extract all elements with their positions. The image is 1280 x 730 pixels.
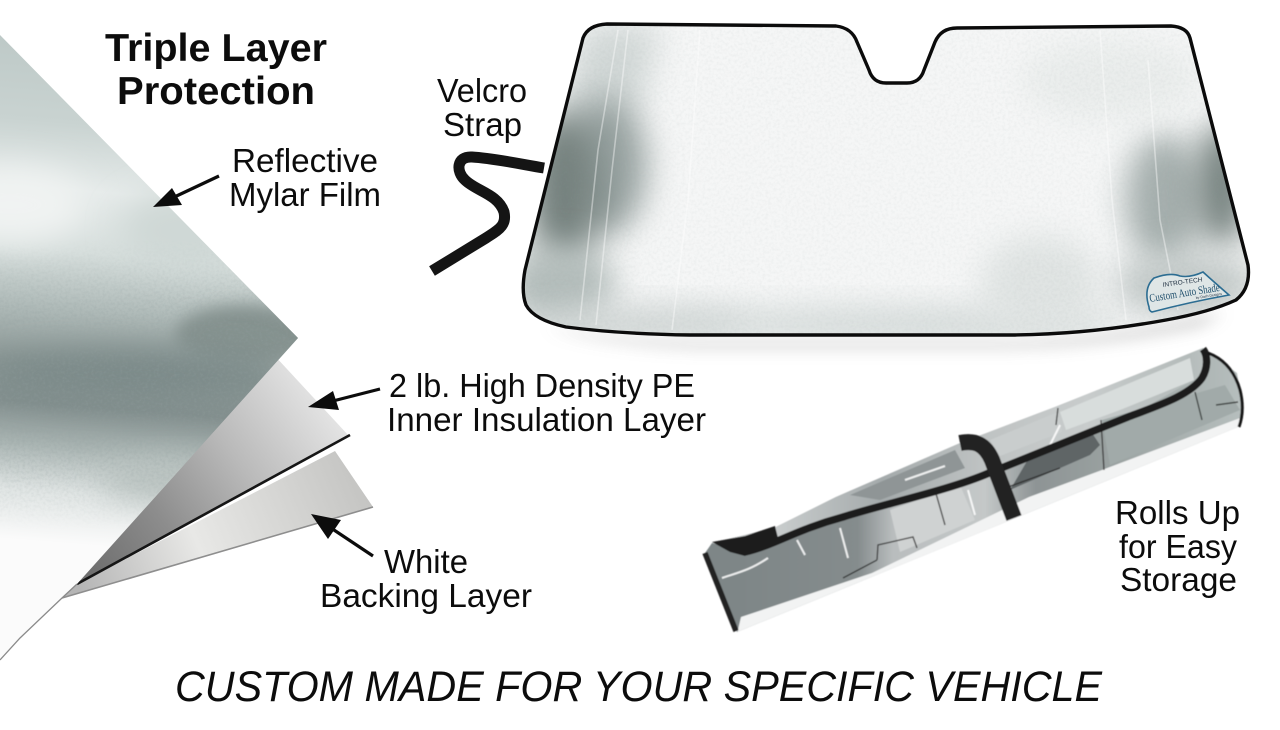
reflective surface bbox=[505, 20, 1257, 343]
bright lower edge strip bbox=[737, 418, 1240, 634]
zipper wedge at near end bbox=[712, 526, 778, 556]
label: velcro strap: Strap bbox=[443, 106, 522, 143]
icon: velcro strap bbox=[432, 157, 544, 271]
tagline: CUSTOM MADE FOR YOUR SPECIFIC VEHICLE bbox=[175, 663, 1103, 711]
callout: reflective mylar film: Mylar Film bbox=[229, 176, 381, 213]
label: velcro strap: Velcro bbox=[437, 72, 527, 109]
callout: white backing layer: Backing Layer bbox=[320, 577, 532, 614]
brand logo: Custom Auto Shade bbox=[1149, 282, 1221, 305]
windshield sun shade bbox=[505, 20, 1257, 347]
far end cap rim bbox=[1208, 353, 1242, 427]
callout: white backing layer bbox=[311, 514, 532, 614]
upper panel above zipper bbox=[712, 348, 1208, 553]
near end cap bbox=[705, 553, 736, 631]
layered material sample bbox=[0, 0, 373, 680]
title: Triple Layer bbox=[105, 27, 327, 70]
brand logo: INTRO-TECH bbox=[1162, 276, 1203, 289]
zipper band bbox=[745, 349, 1207, 552]
black edge between insulation and backing bbox=[77, 435, 350, 584]
arrow: to insulation layer bbox=[308, 389, 380, 410]
black binding outline bbox=[523, 24, 1248, 335]
callout: inner insulation layer: Inner Insulation Layer bbox=[387, 401, 706, 438]
roll body bbox=[695, 340, 1250, 640]
label: rolls up for easy storage: Storage bbox=[1120, 561, 1237, 598]
callout: inner insulation layer bbox=[308, 367, 706, 438]
label: rolls up for easy storage: Rolls Up bbox=[1115, 494, 1240, 531]
callout: white backing layer: White bbox=[384, 543, 468, 580]
brand logo: by Dash Designs bbox=[1196, 292, 1223, 300]
velcro band bbox=[960, 442, 1014, 518]
vertical crease streaks bbox=[580, 30, 1178, 330]
callout: reflective mylar film bbox=[153, 142, 381, 213]
thin lower edge of sheets bbox=[0, 584, 77, 660]
rolled up shade bbox=[695, 340, 1250, 640]
label: rolls up for easy storage bbox=[1115, 494, 1240, 598]
reflective mylar film sheet bbox=[0, 35, 298, 598]
title: Protection bbox=[117, 70, 315, 113]
brand logo bbox=[1147, 272, 1229, 312]
drop shadow under shade bbox=[545, 312, 1225, 347]
inner insulation layer sheet bbox=[70, 342, 349, 584]
wrinkles in silver film bbox=[843, 392, 1238, 578]
title bbox=[105, 27, 327, 113]
label: rolls up for easy storage: for Easy bbox=[1119, 528, 1237, 565]
label: velcro strap bbox=[437, 72, 527, 143]
callout: reflective mylar film: Reflective bbox=[232, 142, 378, 179]
lower panel shapes bbox=[1010, 430, 1100, 490]
callout: inner insulation layer: 2 lb. High Density PE bbox=[389, 367, 695, 404]
white backing layer sheet bbox=[62, 451, 373, 598]
arrow: to mylar film bbox=[153, 176, 219, 207]
arrow: to backing layer bbox=[311, 514, 373, 556]
